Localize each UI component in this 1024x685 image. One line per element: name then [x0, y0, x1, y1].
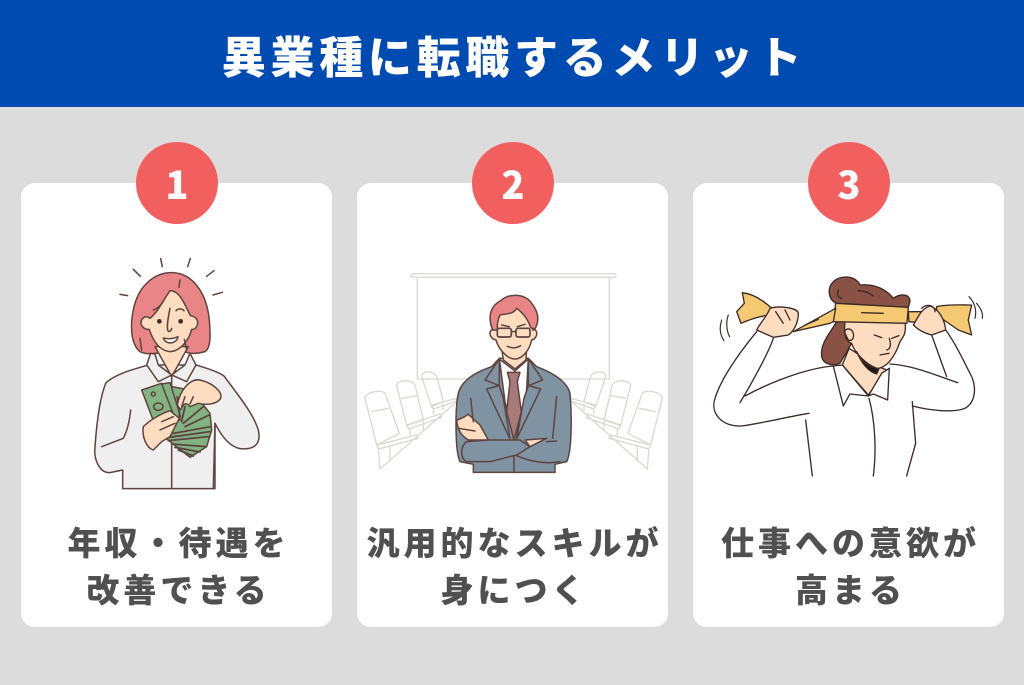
caption 3: 仕事への意欲が: [721, 517, 980, 565]
number badge 2: 2: [501, 155, 525, 210]
panel: card 3: [693, 183, 1004, 627]
number badge 3: [808, 142, 890, 224]
number badge 2: [472, 142, 554, 224]
number badge 1: [136, 142, 218, 224]
caption 1: 年収・待遇を: [68, 517, 290, 565]
panel: card 2: [357, 183, 668, 627]
number badge 1: 1: [165, 155, 189, 210]
caption 1: [68, 517, 290, 612]
caption 2: [366, 517, 662, 612]
panel: card 1: [21, 183, 332, 627]
caption 1: 改善できる: [86, 564, 271, 612]
caption 3: [721, 517, 980, 612]
header band: [0, 0, 1024, 107]
caption 2: 汎用的なスキルが: [366, 517, 662, 565]
caption 3: 高まる: [795, 564, 906, 612]
title: 異業種に転職するメリット: [222, 22, 806, 86]
caption 2: 身につく: [440, 564, 588, 612]
number badge 3: 3: [837, 155, 861, 210]
